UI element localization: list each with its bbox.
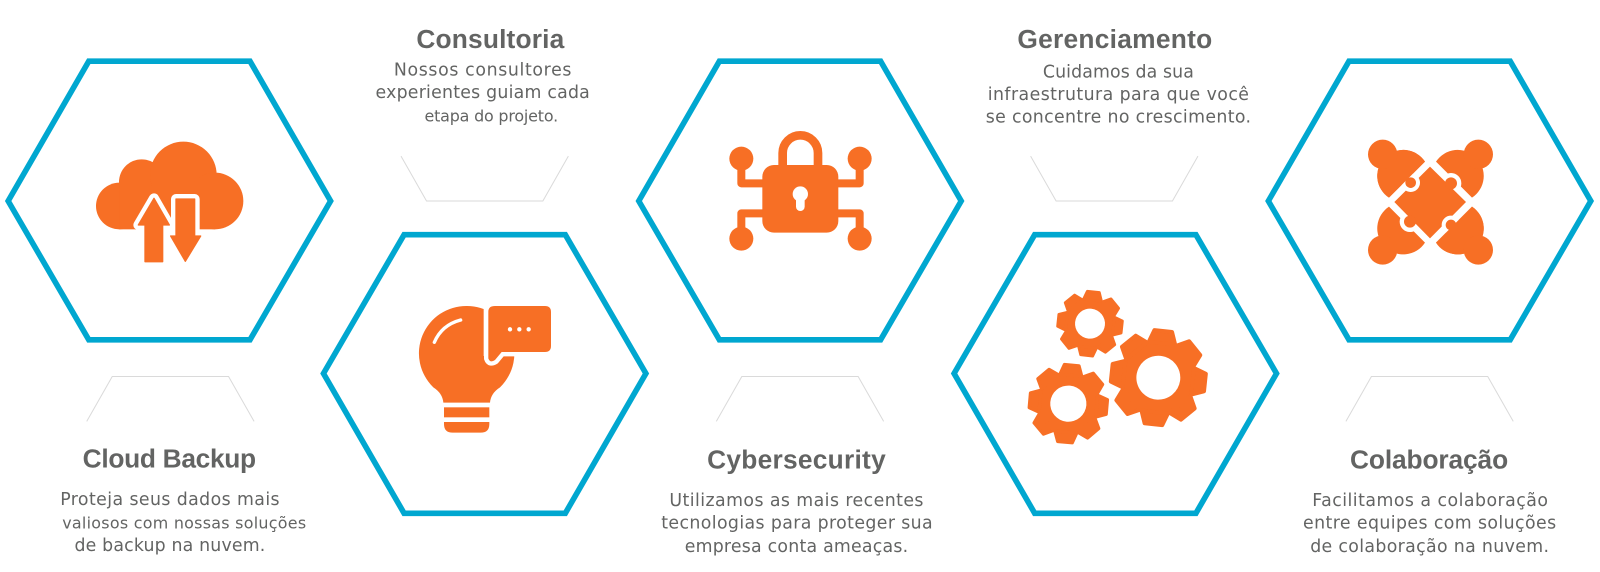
text block: cloud backup [60,443,306,556]
text block: gerenciamento [986,24,1251,127]
text block: cybersecurity: tecnologias para proteger sua [661,514,933,534]
text block: cloud backup: Proteja seus dados mais [60,490,280,510]
text block: colaboração: entre equipes com soluções [1303,514,1556,534]
icon: padlock with circuit nodes [729,135,872,251]
text block: consultoria: Consultoria [416,24,565,54]
text block: gerenciamento: Gerenciamento [1017,24,1212,54]
text block: cloud backup: de backup na nuvem. [74,536,265,556]
hexagon 5: colaboração [1268,61,1591,340]
text block: cybersecurity: Utilizamos as mais recentes [669,491,923,511]
icon: people joined by puzzle pieces [1368,140,1493,265]
text block: gerenciamento: se concentre no crescimento. [986,107,1251,127]
icon: three gears [1026,289,1210,446]
hexagon 3: cybersecurity [639,61,961,340]
text block: consultoria: experientes guiam cada [376,83,590,103]
text block: cybersecurity: empresa conta ameaças. [685,537,908,557]
text block: colaboração [1303,444,1556,557]
text block: cybersecurity [661,444,933,557]
text block: cloud backup: valiosos com nossas soluções [62,514,306,533]
icon: light bulb with speech bubble [419,300,554,433]
icon: cloud with up and down arrows [96,142,243,262]
text block: consultoria: Nossos consultores [394,61,571,81]
text block: consultoria [376,24,590,125]
text block: colaboração: Colaboração [1350,444,1508,474]
text block: consultoria: etapa do projeto. [424,106,558,125]
hexagon 2: consultoria [323,235,646,513]
hexagon 1: cloud backup [8,61,331,340]
text block: colaboração: Facilitamos a colaboração [1312,491,1548,511]
hexagon 4: gerenciamento [954,235,1277,513]
text block: cybersecurity: Cybersecurity [707,444,886,474]
text block: gerenciamento: Cuidamos da sua [1043,63,1194,83]
text block: cloud backup: Cloud Backup [83,443,256,473]
text block: colaboração: de colaboração na nuvem. [1310,537,1549,557]
text block: gerenciamento: infraestrutura para que você [988,85,1249,105]
